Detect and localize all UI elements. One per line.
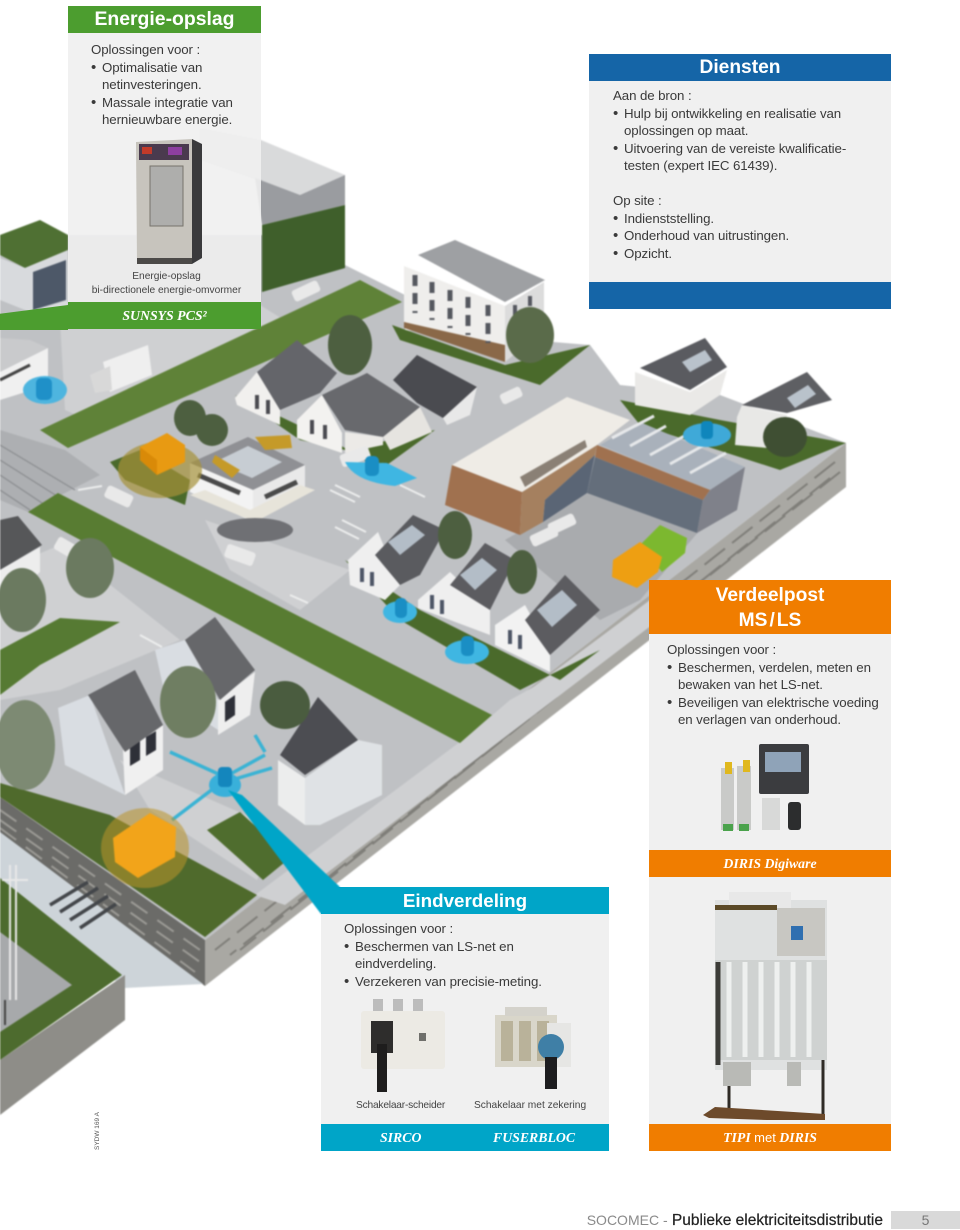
right-hand gardens <box>110 325 846 690</box>
building behind energy panel <box>200 128 345 292</box>
lower-left green plot <box>0 878 122 1060</box>
footer: title: SOCOMEC - Publieke elektriciteitsdistributie <box>587 1212 883 1229</box>
heading: Verdeelpost MS/LS: Verdeelpost <box>716 585 824 606</box>
parking lot <box>505 490 700 620</box>
building far left mid <box>0 338 48 400</box>
text: solutions: • <box>667 694 672 710</box>
panel: Eindverdeling <box>321 887 609 1151</box>
text: services at source: • <box>613 140 618 156</box>
parked cars <box>53 280 577 567</box>
text: solutions: Beveiligen van elektrische voeding <box>678 694 879 710</box>
label: SIRCO: SIRCO <box>380 1130 421 1145</box>
label: FUSERBLOC: FUSERBLOC <box>493 1130 575 1145</box>
houses low centre <box>348 515 600 672</box>
pylon <box>2 865 28 1025</box>
heading: Eindverdeling: Eindverdeling <box>403 890 527 911</box>
band: TIPI met DIRIS: TIPI met DIRIS <box>723 1130 817 1145</box>
text: services on site: Opzicht. <box>624 246 672 260</box>
cafe terrace <box>217 518 293 542</box>
text: services on site: • <box>613 244 618 262</box>
text: solutions: netinvesteringen. <box>102 77 202 92</box>
lawn: garden bed <box>207 812 290 880</box>
green grass extension <box>0 305 68 330</box>
product: SIRCO switch <box>361 999 445 1092</box>
tree at right house <box>763 417 807 457</box>
text: services at source: Aan de bron : <box>613 88 692 103</box>
text: services at source: oplossingen op maat. <box>624 123 748 138</box>
text: solutions: • <box>667 658 672 676</box>
lower-left cliff <box>0 975 125 1115</box>
text: solutions <box>91 42 233 127</box>
trees lower left <box>0 538 310 790</box>
blue nodes <box>23 376 731 797</box>
lawn left <box>0 618 120 695</box>
heading: Diensten: Diensten <box>699 57 781 78</box>
tree near apartment <box>506 307 554 363</box>
supermarket <box>445 397 745 535</box>
grass strip long <box>28 493 492 743</box>
houses right <box>635 338 832 450</box>
text: solutions: Oplossingen voor : <box>344 921 453 936</box>
lawn bottom <box>0 783 257 937</box>
text: services on site: • <box>613 227 618 244</box>
trees behind houses <box>174 315 372 446</box>
trees by low houses <box>438 511 537 594</box>
band: DIRIS Digiware <box>649 850 891 877</box>
grass strip upper <box>40 280 402 448</box>
heading: Eindverdeling <box>321 887 609 914</box>
houses lower left <box>58 617 382 825</box>
caption: Schakelaar met zekering: Schakelaar met zekering <box>474 1100 586 1111</box>
band: TIPI met DIRIS <box>649 1124 891 1151</box>
text: solutions: en verlagen van onderhoud. <box>678 712 841 727</box>
panel: Verdeelpost MS/LS <box>649 580 891 1151</box>
text: solutions: Oplossingen voor : <box>91 42 200 57</box>
heading: Energie-opslag: Energie-opslag <box>94 8 235 30</box>
crossings <box>78 485 425 647</box>
text: solutions: • <box>344 972 349 990</box>
panel: Energie-opslag <box>68 6 261 329</box>
band: SIRCO and FUSERBLOC <box>321 1124 609 1151</box>
product: DIRIS Digiware <box>721 744 809 831</box>
caption: converter <box>92 271 242 296</box>
text: solutions: • <box>91 58 96 76</box>
pointer wedge to Eindverdeling <box>228 790 340 914</box>
substation yard <box>0 932 72 1032</box>
text: solutions: Optimalisatie van <box>102 60 202 74</box>
text: solutions: • <box>91 94 96 110</box>
text: services on site: • <box>613 210 618 226</box>
text: solutions: bewaken van het LS-net. <box>678 677 823 692</box>
caption: Schakelaar-scheider: Schakelaar-scheider <box>356 1100 445 1111</box>
text: services at source: Uitvoering van de vereiste kwalificatie- <box>624 140 846 156</box>
text: services at source: • <box>613 104 618 122</box>
building far left top <box>0 220 68 312</box>
heading: Energie-opslag <box>68 6 261 33</box>
orange box: transformer upper <box>118 433 202 498</box>
footer band <box>589 282 891 309</box>
product: FUSERBLOC switch <box>495 1007 571 1089</box>
text: services at source: testen (expert IEC 61439). <box>624 158 777 173</box>
band: DIRIS Digiware: DIRIS Digiware <box>723 856 817 871</box>
building far left low <box>0 516 42 592</box>
lower road corridor <box>0 832 203 988</box>
text: solutions <box>667 642 879 727</box>
text: solutions: eindverdeling. <box>355 956 436 971</box>
text: solutions: Beschermen, verdelen, meten en <box>678 660 871 674</box>
text: services on site: Onderhoud van uitrustingen. <box>624 228 789 243</box>
product: TIPI panel <box>703 900 827 1120</box>
houses upper centre <box>235 340 477 453</box>
footer: page number <box>891 1211 960 1229</box>
crossroads with tram tracks <box>0 430 100 512</box>
caption: converter: Energie-opslag <box>132 271 201 282</box>
text: services on site: Indienststelling. <box>624 210 714 226</box>
apartment building <box>404 240 545 362</box>
footer: page number: 5 <box>922 1212 929 1228</box>
orange and green box: substation <box>612 525 687 588</box>
light sidewalks <box>0 305 665 905</box>
text: solutions: Verzekeren van precisie-meting. <box>355 974 542 988</box>
text: services on site <box>613 193 789 262</box>
terrain cliff: right face <box>205 443 846 986</box>
text: services at source: Hulp bij ontwikkeling en realisatie van <box>624 106 841 120</box>
cafe building <box>190 435 315 522</box>
text: solutions: Oplossingen voor : <box>667 642 776 657</box>
text: solutions: Beschermen van LS-net en <box>355 938 514 954</box>
band: SUNSYS PCS²: SUNSYS PCS² <box>122 308 207 323</box>
caption: converter: bi-directionele energie-omvormer <box>92 285 241 296</box>
product: converter cabinet <box>136 139 202 264</box>
network lines <box>170 735 272 820</box>
text: solutions: Massale integratie van <box>102 94 233 110</box>
band: SUNSYS PCS² <box>68 302 261 329</box>
text: services at source <box>613 88 846 173</box>
text: solutions: hernieuwbare energie. <box>102 112 232 127</box>
ground and roads <box>0 235 846 940</box>
text: solutions: • <box>344 938 349 954</box>
terrain cliff: left face <box>0 797 205 986</box>
heading: Verdeelpost MS/LS <box>649 580 891 634</box>
document code: SYDW 169 A <box>94 1112 101 1150</box>
text: services on site: Op site : <box>613 193 662 208</box>
orange box: transformer lower <box>101 808 189 888</box>
stairs <box>50 882 116 928</box>
heading: Verdeelpost MS/LS: MS/LS <box>739 610 801 631</box>
panel: Diensten <box>589 54 891 309</box>
truck <box>90 345 152 393</box>
heading: Diensten <box>589 54 891 81</box>
text: solutions <box>344 921 542 990</box>
